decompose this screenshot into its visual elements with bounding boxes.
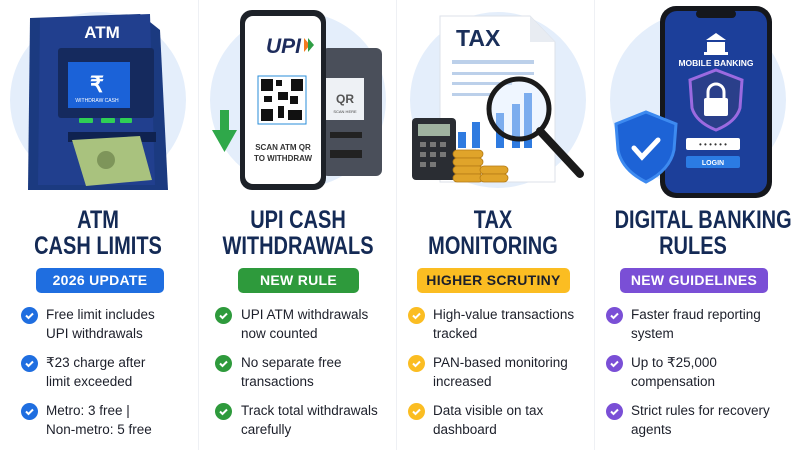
bullet list: ₹23 charge after <box>46 355 145 370</box>
bullet list: Strict rules for recovery <box>631 403 770 418</box>
heading: ATM cash limits <box>34 206 162 260</box>
heading: tax monitoring: TAX <box>474 206 512 234</box>
bullet list: Track total withdrawals <box>241 403 378 418</box>
bullet list <box>215 307 378 437</box>
illustration: tax document with magnifier <box>410 12 586 188</box>
illustration: UPI phone and ATM: QR <box>336 92 354 106</box>
bullet list: Metro: 3 free | <box>46 403 130 418</box>
heading: tax monitoring <box>428 206 558 260</box>
bullet list: No separate free <box>241 355 342 370</box>
bullet list <box>408 307 574 437</box>
badge: higher scrutiny: HIGHER SCRUTINY <box>426 272 561 288</box>
heading: digital banking rules <box>615 206 792 260</box>
illustration: mobile banking phone with shield: MOBILE BANKING <box>678 58 754 68</box>
bullet list: Non-metro: 5 free <box>46 422 152 437</box>
bullet list <box>21 307 155 437</box>
heading: digital banking rules: DIGITAL BANKING <box>615 206 792 234</box>
bullet list: High-value transactions <box>433 307 574 322</box>
bullet list: carefully <box>241 422 291 437</box>
bullet list: dashboard <box>433 422 497 437</box>
badge: 2026 update <box>36 268 164 293</box>
column 3: tax monitoring <box>408 206 574 437</box>
bullet list: Up to ₹25,000 <box>631 355 717 370</box>
illustration: ATM machine: ATM <box>84 23 120 42</box>
badge: higher scrutiny <box>417 268 570 293</box>
bullet list: tracked <box>433 326 477 341</box>
column 2: UPI cash withdrawals <box>215 206 378 437</box>
heading: digital banking rules: RULES <box>659 232 727 260</box>
illustration: ATM machine: WITHDRAW CASH <box>75 98 119 104</box>
illustration: UPI phone and ATM <box>210 10 386 190</box>
bullet list: limit exceeded <box>46 374 132 389</box>
illustration: ATM machine: ₹ <box>90 72 104 97</box>
bullet list: compensation <box>631 374 715 389</box>
bullet list: increased <box>433 374 492 389</box>
illustration: UPI phone and ATM: UPI <box>266 35 302 58</box>
illustration: UPI phone and ATM: TO WITHDRAW <box>254 154 312 163</box>
badge: new guidelines <box>620 268 768 293</box>
badge: new rule <box>238 268 359 293</box>
bullet list: now counted <box>241 326 318 341</box>
heading: ATM cash limits: ATM <box>77 206 119 234</box>
illustration: UPI phone and ATM: SCAN HERE <box>333 109 357 114</box>
bullet list <box>606 307 770 437</box>
heading: ATM cash limits: CASH LIMITS <box>34 232 162 260</box>
bullet list: Free limit includes <box>46 307 155 322</box>
column 4: digital banking rules <box>606 206 792 437</box>
heading: UPI cash withdrawals: WITHDRAWALS <box>222 232 374 260</box>
bullet list: UPI withdrawals <box>46 326 143 341</box>
illustration: ATM machine <box>10 12 186 190</box>
heading: UPI cash withdrawals <box>222 206 374 260</box>
illustration: mobile banking phone with shield <box>610 6 786 198</box>
illustration: tax document with magnifier: TAX <box>456 25 501 51</box>
heading: tax monitoring: MONITORING <box>428 232 558 260</box>
illustration: UPI phone and ATM: SCAN ATM QR <box>255 143 311 152</box>
bullet list: transactions <box>241 374 314 389</box>
bullet list: Data visible on tax <box>433 403 543 418</box>
column 1: ATM cash limits <box>21 206 164 437</box>
bullet list: PAN-based monitoring <box>433 355 568 370</box>
heading: UPI cash withdrawals: UPI CASH <box>250 206 346 234</box>
bullet list: agents <box>631 422 672 437</box>
bullet list: Faster fraud reporting <box>631 307 761 322</box>
illustration: mobile banking phone with shield: • • • • • • <box>699 140 727 149</box>
bullet list: UPI ATM withdrawals <box>241 307 368 322</box>
illustration: mobile banking phone with shield: LOGIN <box>702 160 724 167</box>
bullet list: system <box>631 326 674 341</box>
badge: new rule: NEW RULE <box>260 272 337 288</box>
badge: 2026 update: 2026 UPDATE <box>53 272 147 288</box>
badge: new guidelines: NEW GUIDELINES <box>631 272 757 288</box>
